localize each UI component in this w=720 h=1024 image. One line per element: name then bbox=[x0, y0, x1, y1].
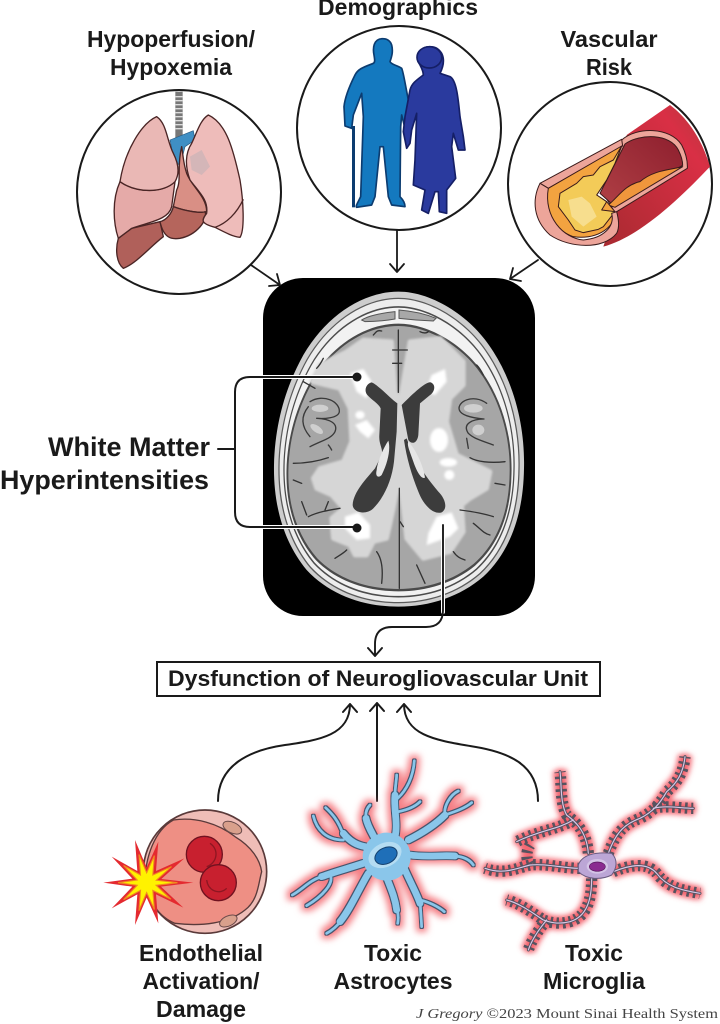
box: dysfunction of neurogliovascular unit bbox=[157, 662, 600, 696]
arrow: demographics to brain bbox=[390, 230, 404, 272]
arrow: vascular risk to brain bbox=[510, 260, 538, 281]
heading: hypoperfusion: Hypoperfusion/ bbox=[87, 26, 256, 52]
heading: vascular: Vascular bbox=[560, 26, 658, 52]
spines bbox=[485, 757, 700, 950]
heading: risk: Risk bbox=[586, 54, 632, 80]
arrow: endothelial to box bbox=[218, 704, 357, 801]
circle: hypoperfusion lungs bbox=[77, 90, 281, 294]
label: endothelial activation/damage: Damage bbox=[156, 996, 246, 1022]
credit line: J Gregory ©2023 Mount Sinai Health System bbox=[416, 1007, 718, 1022]
illustration: axial brain slice bbox=[274, 292, 524, 607]
heading: hypoxemia: Hypoxemia bbox=[110, 54, 232, 80]
label: white matter hyperintensities: Hyperintensities bbox=[0, 465, 209, 495]
label: toxic astrocytes: Astrocytes bbox=[334, 968, 452, 994]
arrow: astrocytes to box bbox=[370, 703, 384, 801]
insula bbox=[312, 405, 328, 412]
white hyperintensities bbox=[345, 369, 458, 545]
arrow: lungs to brain bbox=[251, 265, 280, 286]
icon: artery with plaque bbox=[535, 105, 710, 247]
icon: lungs bbox=[114, 92, 243, 268]
icon: injury burst bbox=[103, 840, 193, 925]
label: toxic microglia: Microglia bbox=[543, 968, 645, 994]
icon: toxic astrocyte bbox=[292, 761, 473, 933]
arrow: microglia to box bbox=[397, 704, 538, 801]
label: toxic astrocytes: Toxic bbox=[364, 940, 422, 966]
white matter bbox=[312, 338, 490, 558]
label: endothelial activation/damage: Activation/ bbox=[142, 968, 260, 994]
bracket: white matter callout bbox=[218, 372, 362, 532]
ventricles bbox=[353, 382, 397, 512]
label: toxic microglia bbox=[543, 940, 645, 994]
label: toxic astrocytes bbox=[334, 940, 452, 994]
icon: endothelial cell bbox=[103, 810, 267, 933]
frontal sinus bbox=[362, 312, 395, 322]
icon: toxic microglia bbox=[485, 757, 700, 950]
icon: elderly couple bbox=[344, 39, 465, 213]
label: endothelial activation/damage bbox=[139, 940, 263, 1022]
label: white matter hyperintensities: White Matter bbox=[48, 432, 210, 462]
circle: vascular risk artery bbox=[508, 82, 712, 286]
circle: demographics figures bbox=[297, 26, 501, 230]
arrow: brain to dysfunction box bbox=[368, 525, 443, 656]
label: toxic microglia: Toxic bbox=[565, 940, 623, 966]
sulci bbox=[293, 330, 505, 588]
box: dysfunction of neurogliovascular unit: Dysfunction of Neurogliovascular Unit bbox=[168, 666, 589, 691]
label: endothelial activation/damage: Endothelial bbox=[139, 940, 263, 966]
panel: brain MRI bbox=[263, 278, 535, 616]
label: white matter hyperintensities bbox=[0, 432, 210, 495]
